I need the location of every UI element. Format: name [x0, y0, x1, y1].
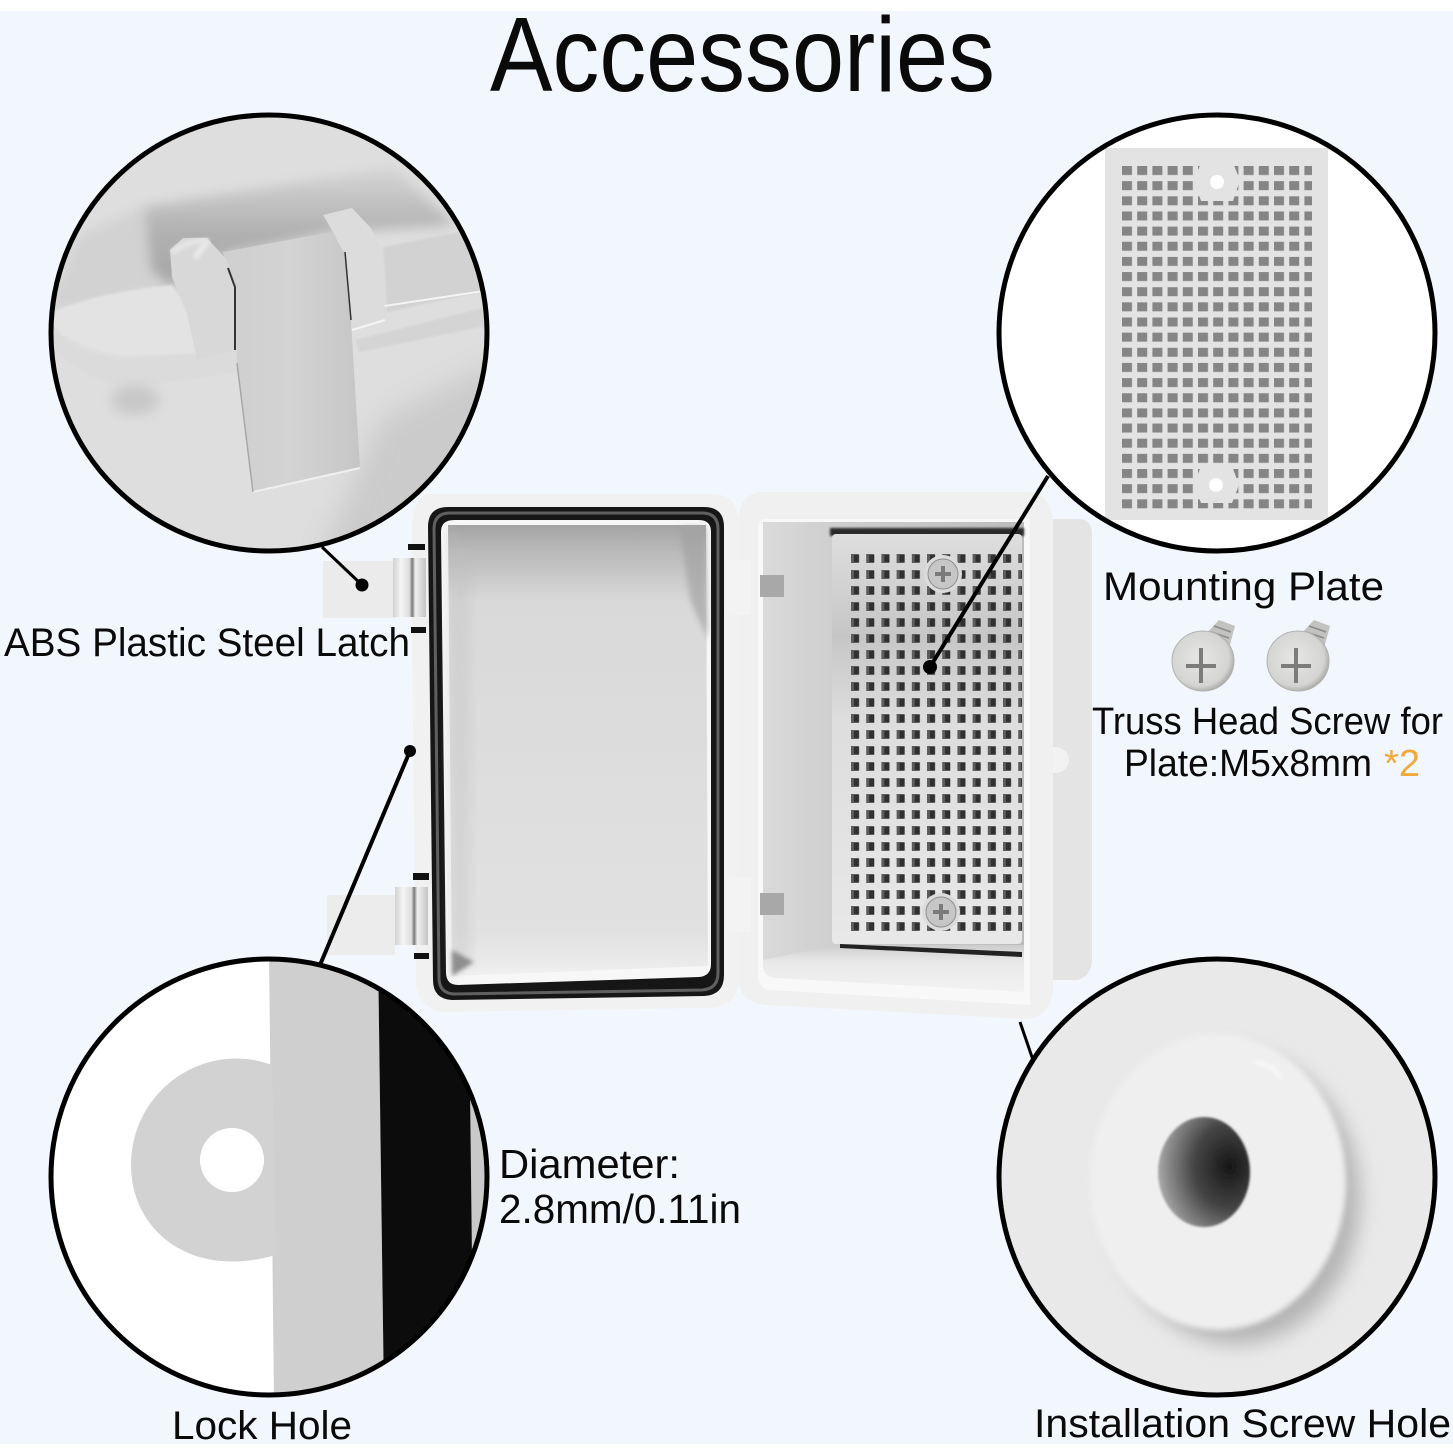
label: truss head screw: *2 — [1384, 743, 1420, 785]
left latch clip — [170, 238, 235, 360]
enclosure lid with black gasket — [412, 494, 738, 1012]
perforated plate — [1105, 148, 1328, 520]
label: diameter — [499, 1141, 741, 1232]
icon: truss head screws — [1172, 620, 1330, 691]
panel: mounting plate detail circle — [999, 115, 1435, 551]
label: mounting plate: Mounting Plate — [1103, 565, 1384, 609]
right latch clip — [323, 208, 384, 312]
latch strap — [223, 232, 360, 492]
product photo: open enclosure — [323, 492, 1092, 1019]
label: installation screw hole: Installation Screw Hole — [1034, 1402, 1451, 1446]
mounting plate inside enclosure — [832, 534, 1022, 944]
lock tab — [131, 1058, 276, 1262]
lock hole tab on base — [1041, 747, 1069, 773]
lid slope on the left — [55, 215, 155, 308]
enclosure base, back body — [1040, 519, 1092, 980]
plate mounting holes — [1198, 166, 1239, 503]
screw hole — [1158, 1117, 1250, 1227]
enclosure base, front frame — [738, 492, 1053, 1019]
raised lid wall shadow — [143, 167, 455, 287]
label: latch: ABS Plastic Steel Latch — [4, 621, 410, 665]
leader lines and dots — [320, 476, 1048, 1060]
panel: installation screw hole detail circle — [999, 959, 1435, 1395]
label: truss head screw: Truss Head Screw for — [1092, 701, 1443, 743]
label: truss head screw — [1092, 701, 1443, 785]
label: diameter: Diameter: — [499, 1141, 680, 1187]
panel: latch detail circle — [40, 110, 500, 560]
enclosure interior — [727, 519, 1030, 1005]
latch tabs on the lid — [323, 561, 395, 955]
label: truss head screw: Plate:M5x8mm — [1124, 743, 1372, 785]
base shadow — [326, 368, 482, 540]
hinges and latch slots — [393, 544, 429, 959]
icon: screw right — [1267, 620, 1330, 691]
label: diameter: 2.8mm/0.11in — [499, 1186, 741, 1232]
lid rim — [54, 284, 175, 316]
base rim — [52, 325, 240, 388]
lock hole — [200, 1128, 264, 1192]
label: lock hole: Lock Hole — [172, 1404, 352, 1448]
installed plate screws — [922, 555, 962, 931]
icon: screw left — [1172, 620, 1235, 691]
panel: lock hole detail circle — [51, 950, 500, 1400]
